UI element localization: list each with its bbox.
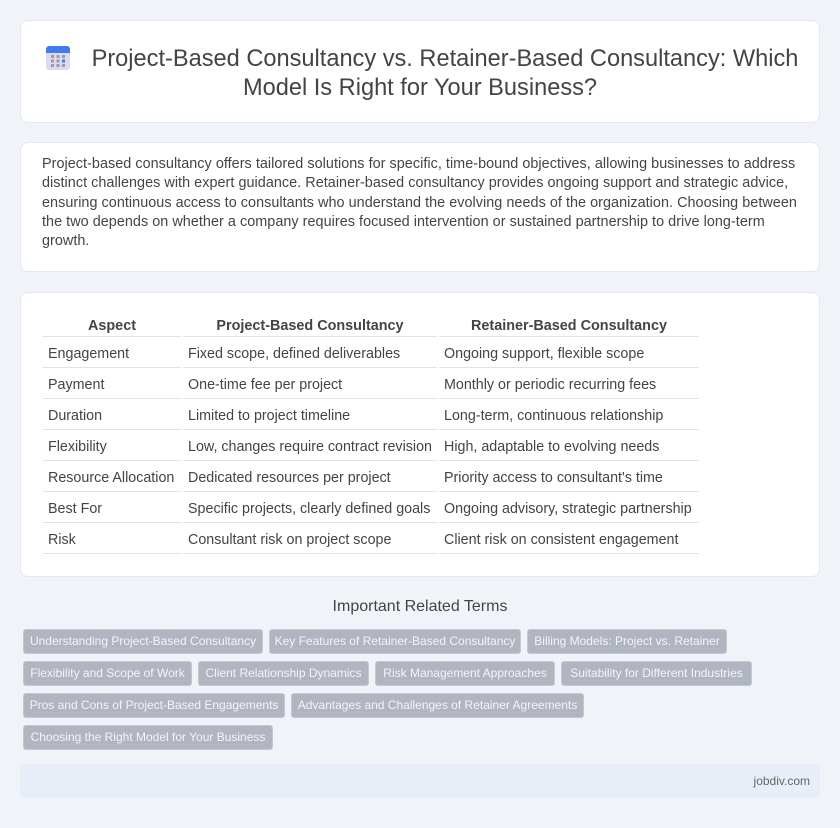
table: comparison: Low, changes require contract revision (188, 439, 432, 455)
heading: related terms: Important Related Terms (333, 598, 507, 615)
table: comparison: High, adaptable to evolving needs (444, 439, 659, 455)
table: comparison: Specific projects, clearly defined goals (188, 501, 430, 517)
table: comparison: Fixed scope, defined deliverables (188, 346, 400, 362)
table: comparison: Best For (48, 501, 102, 517)
tag list: related terms: Advantages and Challenges of Retainer Agreements (298, 698, 577, 712)
text block: introduction: growth. (42, 233, 89, 249)
text block: introduction (42, 156, 797, 249)
panel: introduction (20, 142, 820, 272)
table: comparison: Ongoing support, flexible scope (444, 346, 644, 362)
icon: calendar (46, 46, 70, 70)
table: comparison: Consultant risk on project scope (188, 532, 391, 548)
text block: introduction: the two depends on whether a company requires focused intervention or sustained partnership to drive long-term (42, 214, 765, 230)
table: comparison (43, 318, 699, 554)
footer (20, 764, 820, 798)
tag list: related terms: Key Features of Retainer-Based Consultancy (275, 634, 515, 648)
panel: title card (20, 20, 820, 123)
table: comparison: Project-Based Consultancy (216, 318, 404, 334)
tag list: related terms: Client Relationship Dynamics (205, 666, 362, 680)
tag list: related terms: Pros and Cons of Project-Based Engagements (30, 698, 278, 712)
tag list: related terms: Suitability for Different Industries (570, 666, 743, 680)
table: comparison: Aspect (88, 318, 136, 334)
text block: introduction: ensuring continuous access to consultants who understand the evolving needs of the organization. Choosing between (42, 195, 797, 211)
tag list: related terms (23, 629, 752, 750)
table: comparison: Risk (48, 532, 76, 548)
table: comparison: Priority access to consultant's time (444, 470, 663, 486)
table: comparison: Monthly or periodic recurring fees (444, 377, 656, 393)
table: comparison: Long-term, continuous relationship (444, 408, 663, 424)
title: Project-Based Consultancy vs. Retainer-Based Consultancy: Which (92, 46, 798, 72)
table: comparison: Flexibility (48, 439, 107, 455)
table: comparison: Limited to project timeline (188, 408, 350, 424)
footer credit: jobdiv.com (754, 774, 810, 788)
table: comparison: Engagement (48, 346, 129, 362)
tag list: related terms: Risk Management Approaches (383, 666, 547, 680)
tag list: related terms: Billing Models: Project vs. Retainer (534, 634, 720, 648)
title: Model Is Right for Your Business? (243, 75, 597, 101)
table: comparison: Payment (48, 377, 104, 393)
tag list: related terms: Flexibility and Scope of Work (30, 666, 185, 680)
table: comparison: Client risk on consistent engagement (444, 532, 678, 548)
table: comparison: Duration (48, 408, 102, 424)
text block: introduction: distinct challenges with expert guidance. Retainer-based consultancy provides ongoing support and strategic advice, (42, 175, 788, 191)
table: comparison: Dedicated resources per project (188, 470, 391, 486)
table: comparison: Ongoing advisory, strategic partnership (444, 501, 692, 517)
table: comparison: Resource Allocation (48, 470, 174, 486)
title (92, 46, 798, 101)
text block: introduction: Project-based consultancy offers tailored solutions for specific, time-bound objectives, allowing businesses to address (42, 156, 795, 172)
tag list: related terms: Understanding Project-Based Consultancy (30, 634, 256, 648)
panel: comparison table (20, 292, 820, 577)
table: comparison: One-time fee per project (188, 377, 342, 393)
tag list: related terms: Choosing the Right Model for Your Business (31, 730, 265, 744)
table: comparison: Retainer-Based Consultancy (471, 318, 667, 334)
